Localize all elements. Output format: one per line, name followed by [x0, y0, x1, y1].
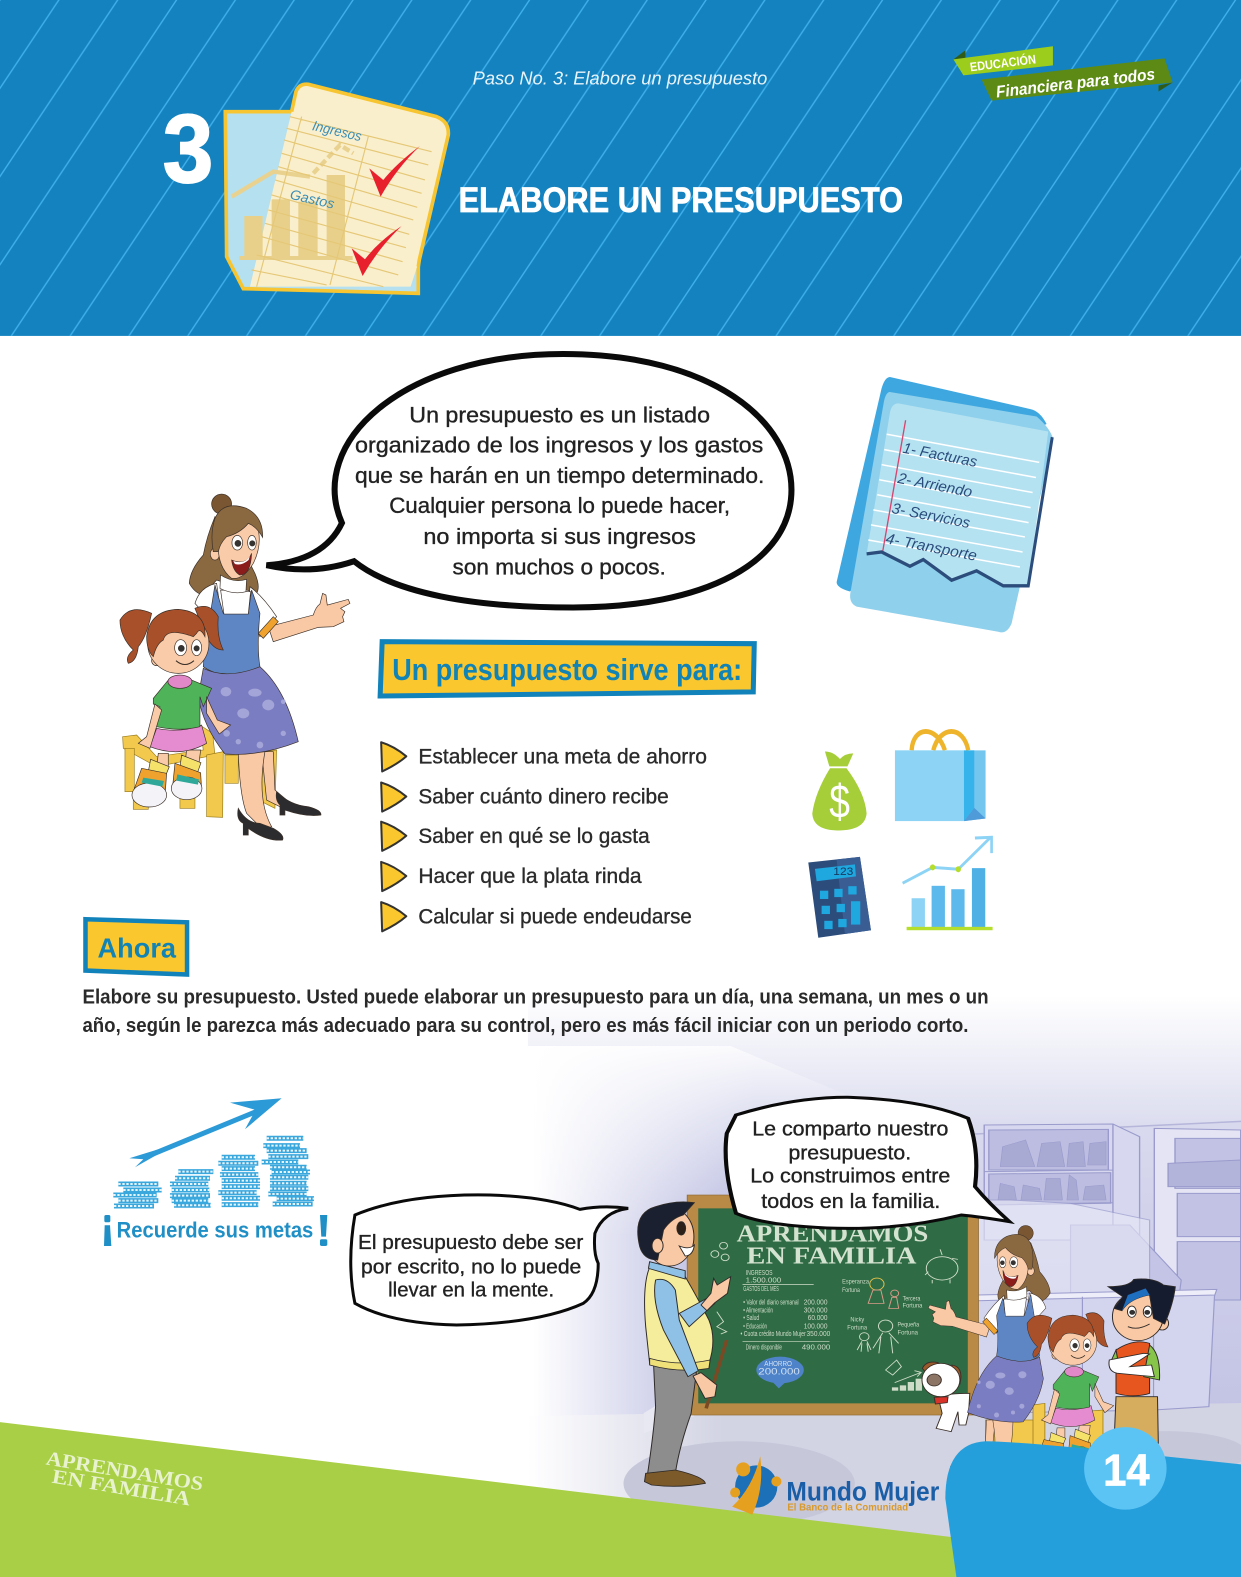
savings bubble	[756, 1357, 804, 1388]
budget list on board: INGRESOS	[746, 1269, 773, 1277]
chalkboard: Tercera	[903, 1296, 920, 1303]
speech bubble: written budget	[351, 1195, 628, 1325]
stool in scene	[986, 1403, 1103, 1450]
character: father	[638, 1202, 731, 1486]
bullet 2	[381, 782, 669, 812]
icon: budget sheets: Ingresos	[311, 117, 363, 144]
speech bubble: definition	[267, 354, 791, 607]
stool	[123, 725, 277, 817]
bullet 5	[381, 902, 692, 931]
paragraph: año, según le parezca más adecuado para su control, pero es más fácil iniciar con un periodo corto.	[82, 1015, 968, 1037]
budget list on board: • Alimentación	[743, 1306, 773, 1314]
speech bubble: family budget: todos en la familia.	[761, 1191, 940, 1213]
notebook list text: 3- Servicios	[890, 500, 972, 532]
savings bubble: AHORRO	[764, 1360, 792, 1368]
bubble text: que se harán en un tiempo determinado.	[355, 463, 764, 488]
budget list on board: • Valor del diario semanal	[743, 1298, 799, 1307]
budget list on board: Dinero disponible	[746, 1343, 782, 1351]
coin stacks	[113, 1138, 314, 1206]
logo ribbon: Educación financiera para todos: EDUCACIÓN	[969, 51, 1037, 74]
speech bubble: family budget: Le comparto nuestro	[752, 1118, 948, 1140]
chalkboard: Fortuna	[847, 1325, 867, 1331]
character: boy	[1108, 1279, 1175, 1443]
page number panel	[945, 1427, 1241, 1577]
mother	[189, 494, 350, 840]
logo: Mundo Mujer: El Banco de la Comunidad	[787, 1503, 908, 1514]
heading box: Un presupuesto sirve para: Un presupuesto sirve para:	[392, 654, 742, 687]
bullet 3	[381, 822, 650, 851]
green corner band	[0, 1422, 965, 1577]
bullet 4	[381, 862, 642, 891]
brand text: Aprendamos en familia: APRENDAMOS	[44, 1448, 205, 1496]
bullet 2: Saber cuánto dinero recibe	[418, 786, 669, 809]
chalkboard: Esperanza	[842, 1279, 869, 1285]
daughter	[120, 606, 231, 807]
character: girl in scene	[1027, 1313, 1114, 1470]
budget list on board: 60.000	[808, 1314, 827, 1322]
budget list on board: • Educación	[743, 1322, 767, 1330]
bubble text: Un presupuesto es un listado	[409, 402, 710, 427]
logo emblem	[730, 1456, 781, 1515]
slogan: Recuerde sus metas	[117, 1217, 313, 1242]
budget list on board: 200.000	[804, 1298, 827, 1307]
logo: Mundo Mujer	[730, 1456, 940, 1515]
notebook list text	[884, 440, 979, 565]
icon: growth chart	[903, 837, 993, 930]
board title	[737, 1221, 928, 1269]
character: dog	[922, 1362, 970, 1432]
icon: calculator: 123	[833, 865, 853, 878]
speech bubble: family budget: presupuesto.	[788, 1143, 911, 1165]
notebook list text: 2- Arriendo	[895, 470, 974, 501]
bullet 5: Calcular si puede endeudarse	[418, 905, 692, 928]
logo ribbon: Educación financiera para todos: Financiera para todos	[995, 65, 1156, 102]
chalkboard: Fortuna	[903, 1303, 922, 1309]
bullet 4: Hacer que la plata rinda	[418, 865, 642, 888]
budget list on board: 300.000	[804, 1306, 827, 1314]
notebook list text: 1- Facturas	[901, 440, 979, 471]
counter and register	[978, 1200, 1217, 1413]
icon: budget sheets	[225, 84, 448, 293]
chalkboard: Pequeña	[897, 1322, 919, 1329]
budget list on board: 1.500.000	[746, 1276, 781, 1285]
savings bubble: 200.000	[758, 1367, 800, 1377]
budget list on board	[741, 1269, 830, 1351]
speech bubble: written budget: por escrito, no lo puede	[361, 1256, 581, 1278]
heading box: Un presupuesto sirve para	[380, 642, 754, 696]
page number panel: 14	[1103, 1446, 1150, 1495]
speech bubble: family budget: Lo construimos entre	[750, 1166, 950, 1188]
character: mother in scene	[928, 1226, 1050, 1487]
bubble text: no importa si sus ingresos	[423, 524, 696, 549]
icon: budget sheets: Gastos	[289, 186, 336, 212]
chalkboard: Fortuna	[897, 1330, 918, 1337]
paragraph: Elabore su presupuesto. Usted puede elaborar un presupuesto para un día, una semana, un mes o un	[82, 987, 989, 1009]
heading box: Ahora	[85, 919, 187, 975]
arrow	[129, 1098, 282, 1167]
budget list on board: • Salud	[743, 1314, 759, 1322]
chalkboard: Fortuna	[842, 1287, 860, 1294]
budget list on board: GASTOS DEL MES	[743, 1285, 779, 1293]
bullet 1	[381, 742, 707, 771]
notebook list text: 4- Transporte	[884, 530, 978, 565]
graphic: remember your goals	[104, 1098, 327, 1246]
budget list on board: 100.000	[804, 1322, 827, 1330]
budget list on board: 350.000	[807, 1330, 830, 1338]
icon: shopping bag	[895, 731, 986, 821]
icon: notebook list	[837, 377, 1053, 632]
heading box: Ahora: Ahora	[98, 932, 176, 963]
brand text: Aprendamos en familia: EN FAMILIA	[50, 1466, 193, 1511]
icons group	[808, 731, 993, 938]
logo: Mundo Mujer: Mundo Mujer	[786, 1476, 940, 1507]
icon: calculator	[808, 857, 871, 938]
bubble text: organizado de los ingresos y los gastos	[355, 433, 763, 458]
header band	[0, 0, 1241, 336]
speech bubble: family budget	[726, 1097, 1010, 1228]
scene characters	[638, 1202, 1175, 1487]
bubble text	[355, 402, 764, 579]
paragraph	[82, 987, 989, 1037]
step subtitle: Paso No. 3: Elabore un presupuesto	[473, 68, 767, 88]
board title: APRENDAMOS	[737, 1221, 928, 1247]
chalk doodles	[711, 1242, 958, 1383]
budget list on board: • Cuota crédito Mundo Mujer	[741, 1330, 806, 1338]
chalkboard	[687, 1195, 978, 1415]
bullet 1: Establecer una meta de ahorro	[418, 745, 707, 768]
bubble text: son muchos o pocos.	[453, 554, 666, 579]
speech bubble: written budget: llevar en la mente.	[388, 1279, 554, 1301]
scene background: store interior	[528, 991, 1241, 1577]
characters: mother and daughter on stool	[120, 494, 350, 840]
bubble text: Cualquier persona lo puede hacer,	[389, 493, 730, 518]
icon: money bag	[812, 751, 867, 830]
budget list on board: 490.000	[802, 1343, 830, 1351]
logo ribbon: Educación financiera para todos	[953, 46, 1173, 102]
speech bubble: written budget: El presupuesto debe ser	[358, 1232, 584, 1254]
shelves	[984, 1124, 1241, 1300]
icon: money bag: $	[829, 776, 850, 828]
brand text: Aprendamos en familia	[44, 1448, 205, 1511]
step number: 3	[163, 96, 213, 203]
board title: EN FAMILIA	[746, 1242, 916, 1269]
title: ELABORE UN PRESUPUESTO	[459, 181, 903, 220]
chalkboard: Nicky	[850, 1317, 865, 1324]
bullet list	[381, 742, 707, 931]
bullet 3: Saber en qué se lo gasta	[418, 825, 650, 848]
